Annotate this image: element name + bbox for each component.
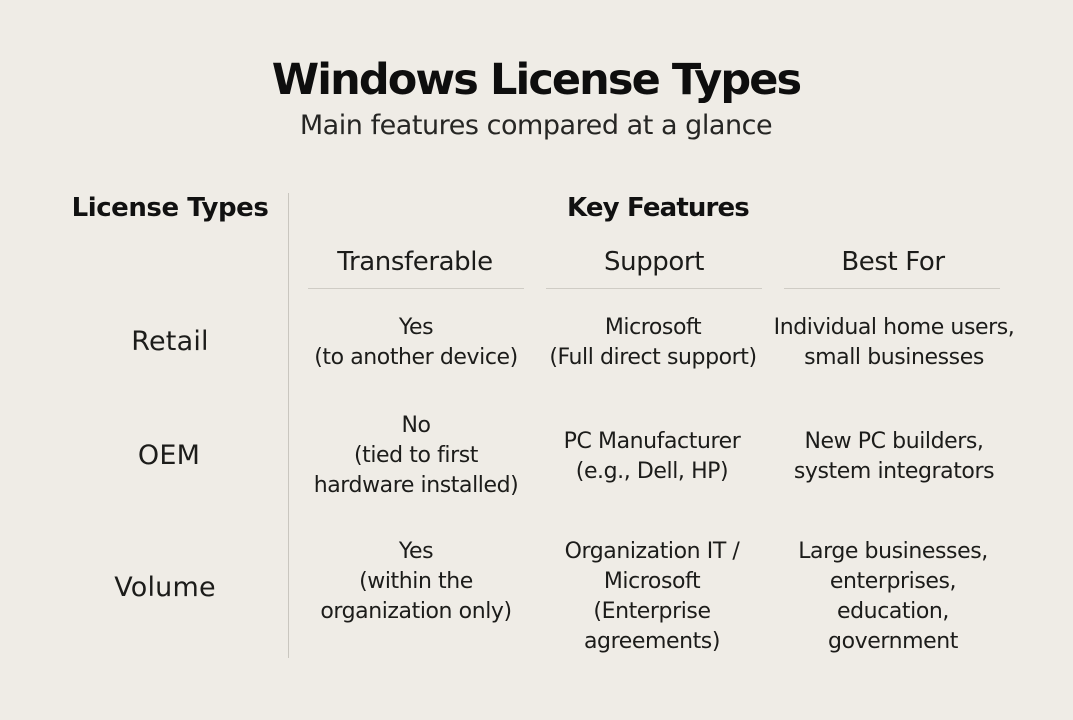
retail best for: small businesses xyxy=(804,345,984,370)
oem support: (e.g., Dell, HP) xyxy=(576,459,728,484)
retail transferable: Yes xyxy=(399,315,433,340)
volume support: agreements) xyxy=(584,629,720,654)
header rule: best for xyxy=(784,288,1000,289)
row label: oem: OEM xyxy=(138,440,200,471)
retail support: (Full direct support) xyxy=(549,345,757,370)
volume transferable: Yes xyxy=(399,539,433,564)
oem support: PC Manufacturer xyxy=(564,429,740,454)
oem best for xyxy=(794,429,994,484)
retail support: Microsoft xyxy=(605,315,701,340)
volume best for: education, xyxy=(837,599,949,624)
volume support: Microsoft xyxy=(604,569,700,594)
column header: best for: Best For xyxy=(841,247,945,277)
oem transferable: (tied to first xyxy=(354,443,478,468)
oem transferable: hardware installed) xyxy=(314,473,518,498)
retail best for xyxy=(774,315,1014,370)
heading: license types: License Types xyxy=(72,193,268,223)
subtitle: Main features compared at a glance xyxy=(300,110,772,141)
oem transferable: No xyxy=(401,413,431,438)
column header: support: Support xyxy=(604,247,704,277)
oem best for: system integrators xyxy=(794,459,994,484)
retail support xyxy=(549,315,757,370)
volume support: (Enterprise xyxy=(593,599,711,624)
title: Windows License Types xyxy=(272,55,800,105)
row label: retail: Retail xyxy=(131,326,209,357)
volume support: Organization IT / xyxy=(565,539,739,564)
volume transferable xyxy=(320,539,512,624)
volume transferable: (within the xyxy=(359,569,473,594)
volume transferable: organization only) xyxy=(320,599,512,624)
header rule: support xyxy=(546,288,762,289)
retail transferable: (to another device) xyxy=(314,345,518,370)
column header: transferable: Transferable xyxy=(337,247,493,277)
volume best for: government xyxy=(828,629,958,654)
oem best for: New PC builders, xyxy=(804,429,984,454)
vertical divider xyxy=(288,193,289,658)
retail best for: Individual home users, xyxy=(774,315,1014,340)
volume best for: Large businesses, xyxy=(798,539,988,564)
volume best for xyxy=(798,539,988,654)
oem support xyxy=(564,429,741,484)
header rule: transferable xyxy=(308,288,524,289)
oem transferable xyxy=(314,413,518,498)
volume best for: enterprises, xyxy=(830,569,956,594)
row label: volume: Volume xyxy=(114,572,216,603)
retail transferable xyxy=(314,315,518,370)
volume support xyxy=(565,539,740,654)
heading: key features: Key Features xyxy=(567,193,749,223)
